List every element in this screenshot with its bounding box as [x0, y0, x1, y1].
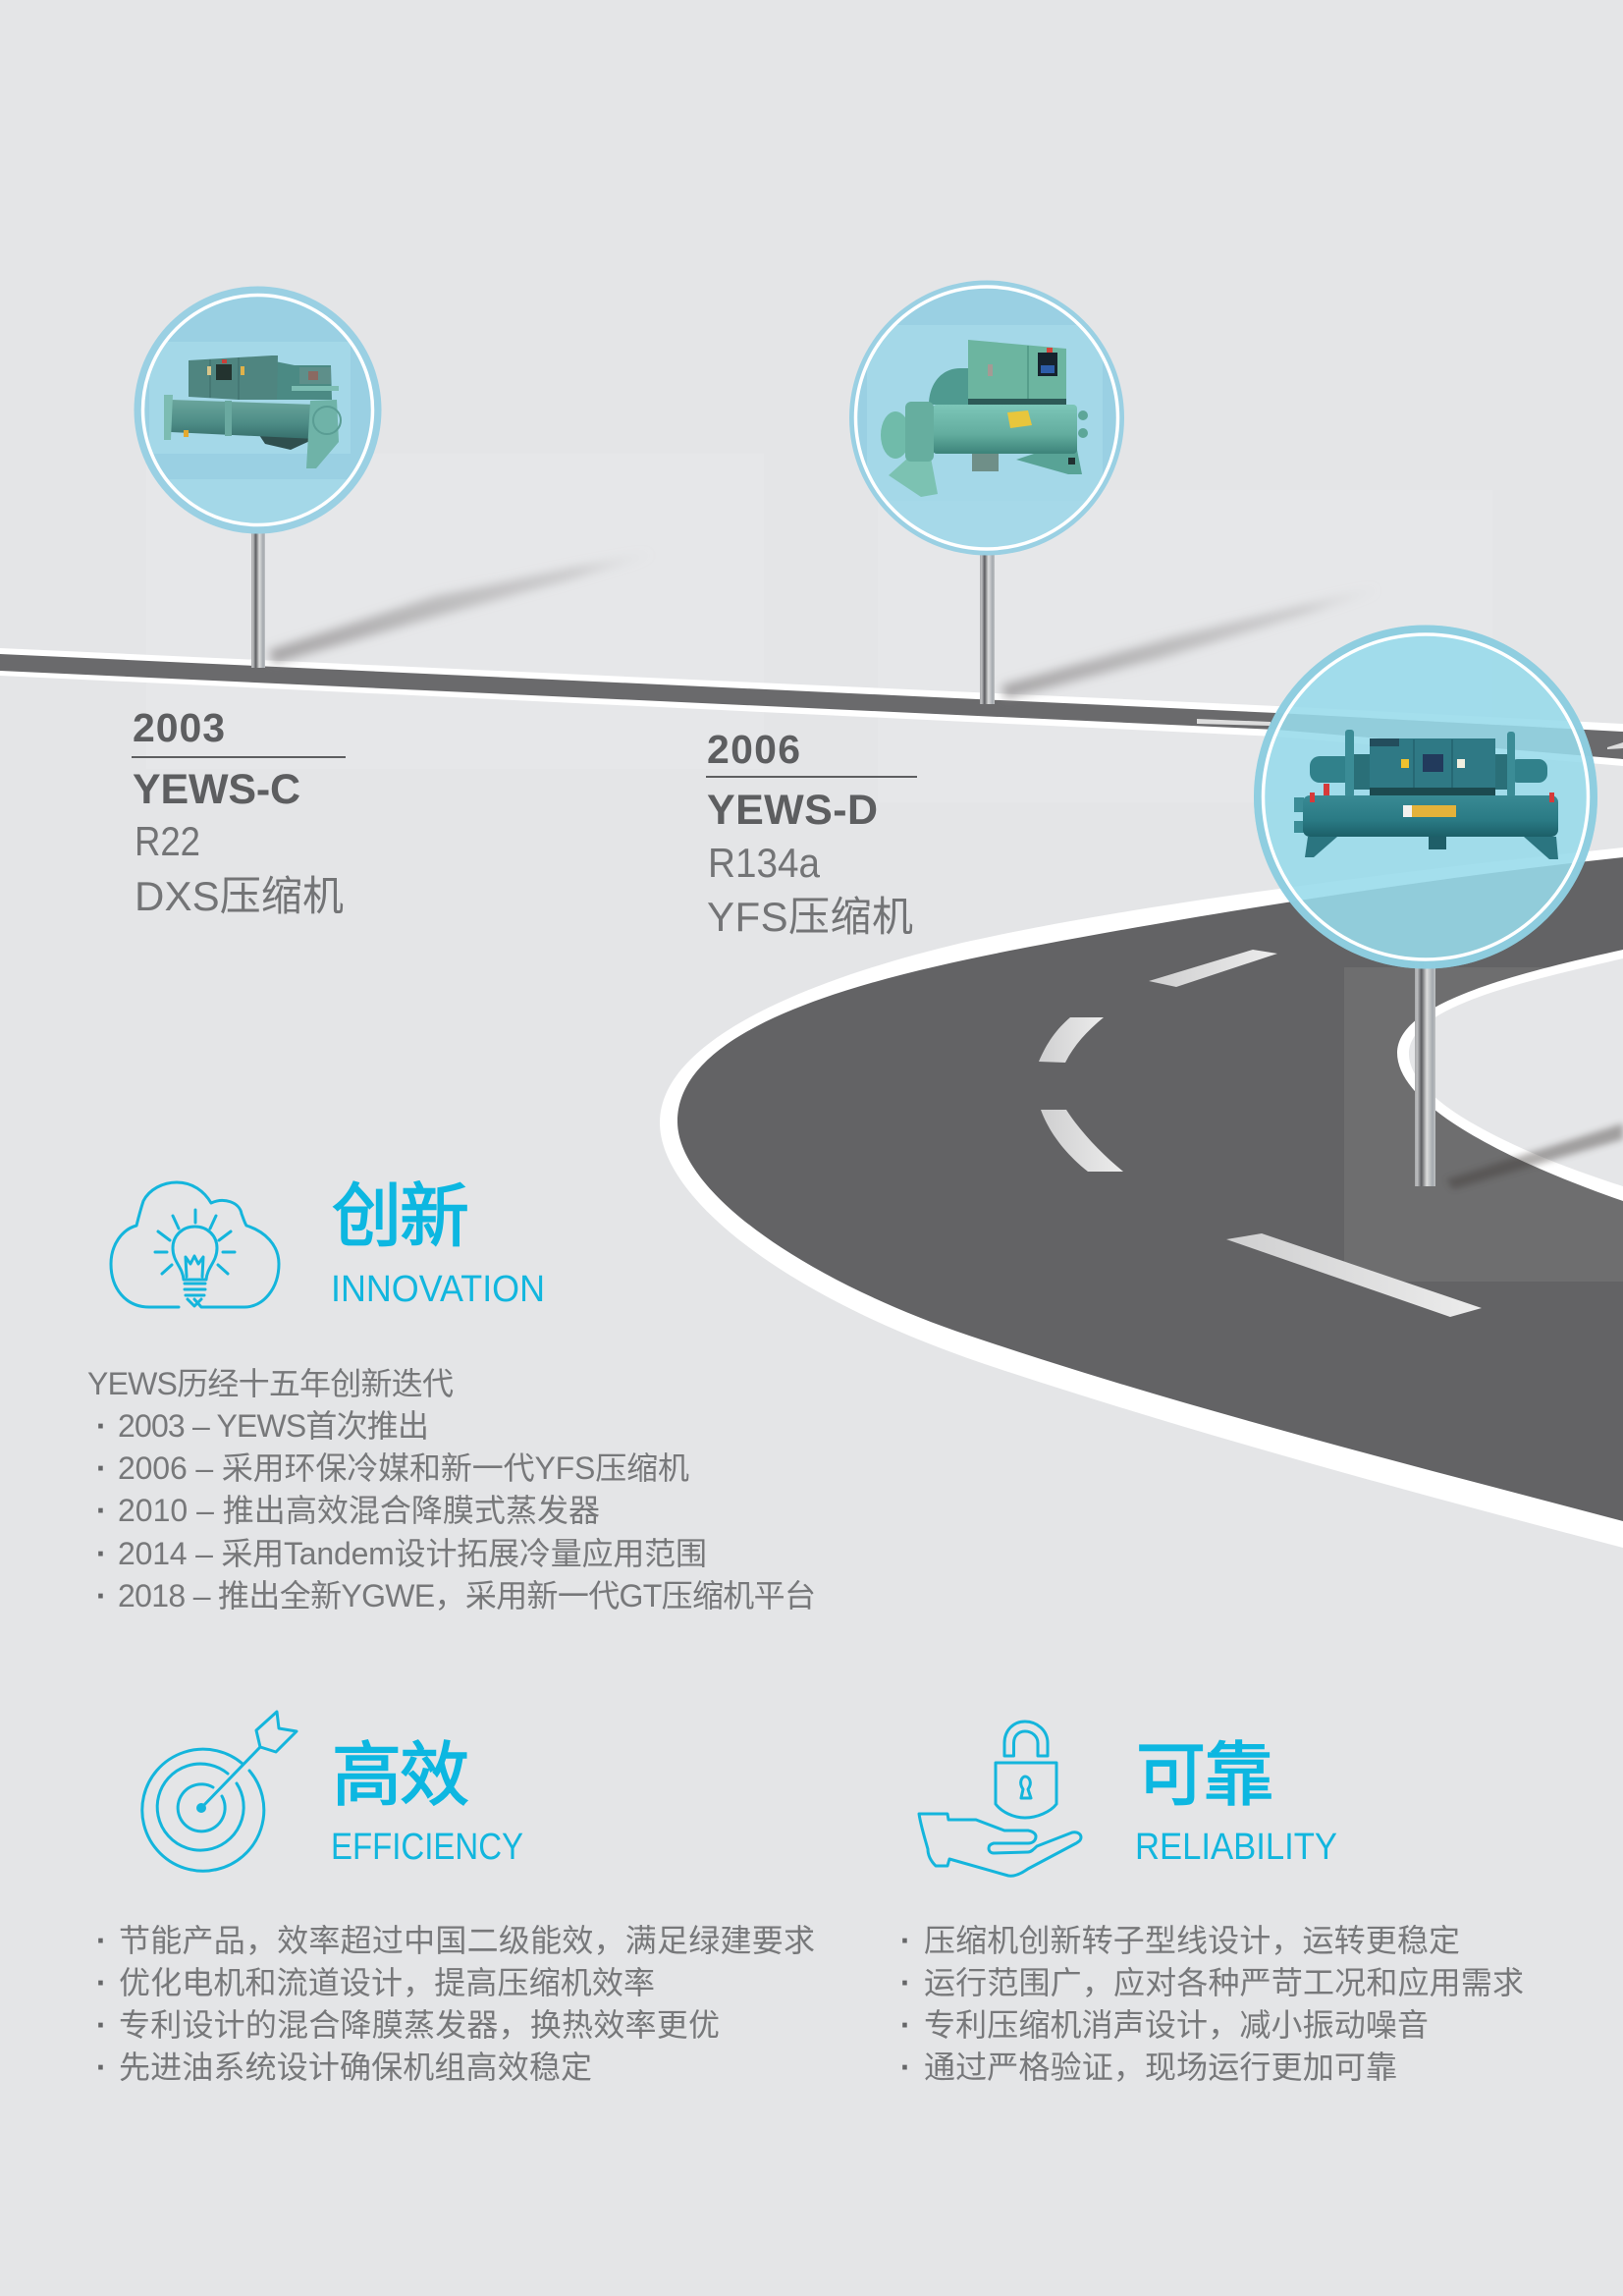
innovation text block: 2018 – 推出全新YGWE，采用新一代GT压缩机平台 [118, 1578, 816, 1613]
icon: target with arrow [142, 1712, 297, 1871]
milestone label: 2003: 2003 [133, 705, 225, 750]
milestone label: 2006: YFS压缩机 [707, 894, 913, 940]
reliability text block: · [900, 2007, 911, 2043]
milestone label: 2003: R22 [135, 818, 200, 864]
heading: 高效: 高效 [332, 1737, 469, 1815]
innovation text block: 2014 – 采用Tandem设计拓展冷量应用范围 [118, 1536, 707, 1571]
heading: 创新: 创新 [332, 1178, 469, 1256]
section: innovation [87, 1178, 816, 1613]
subheading: INNOVATION: INNOVATION [331, 1269, 545, 1310]
icon: lock over hand [919, 1722, 1081, 1876]
section: reliability [900, 1722, 1524, 2085]
icon: chiller unit YGWE [1294, 730, 1558, 859]
innovation text block: · [96, 1493, 107, 1528]
efficiency text block: · [96, 2050, 107, 2085]
pole 2018 [1415, 962, 1435, 1186]
icon: cloud with light bulb [111, 1182, 279, 1307]
reliability text block: 运行范围广，应对各种严苛工况和应用需求 [924, 1965, 1524, 2000]
innovation text block: · [96, 1578, 107, 1613]
efficiency text block: 优化电机和流道设计，提高压缩机效率 [119, 1965, 655, 2000]
efficiency text block [96, 1923, 815, 2085]
icon: chiller unit C [164, 355, 341, 468]
milestone label: 2003 [132, 705, 346, 919]
milestone label: 2006: YEWS-D [707, 787, 878, 834]
innovation text block: · [96, 1450, 107, 1486]
efficiency text block: · [96, 2007, 107, 2043]
reliability text block: 专利压缩机消声设计，减小振动噪音 [924, 2007, 1429, 2043]
sign: YGWE chiller [1254, 625, 1597, 968]
innovation text block: 2010 – 推出高效混合降膜式蒸发器 [118, 1493, 600, 1528]
reliability text block: · [900, 2050, 911, 2085]
icon: chiller unit D [881, 340, 1088, 497]
efficiency text block: 专利设计的混合降膜蒸发器，换热效率更优 [119, 2007, 720, 2043]
reliability text block: · [900, 1923, 911, 1958]
thin road in the distance [0, 648, 1623, 766]
pole 2003 [251, 525, 265, 668]
sign: YEWS-D chiller [849, 281, 1124, 560]
milestone label: 2006 [706, 727, 917, 940]
reliability text block: 通过严格验证，现场运行更加可靠 [924, 2050, 1397, 2085]
reliability text block: · [900, 1965, 911, 2000]
sign: YEWS-C chiller [134, 287, 381, 538]
innovation text block [87, 1366, 816, 1613]
milestone label: 2003: DXS压缩机 [135, 873, 344, 919]
subheading: RELIABILITY: RELIABILITY [1135, 1827, 1337, 1868]
milestone label: 2006: 2006 [707, 727, 800, 772]
innovation text block: 2006 – 采用环保冷媒和新一代YFS压缩机 [118, 1450, 689, 1486]
heading: 可靠: 可靠 [1136, 1737, 1273, 1815]
efficiency text block: · [96, 1965, 107, 2000]
milestone label: 2006: R134a [708, 840, 821, 886]
innovation text block: · [96, 1536, 107, 1571]
subheading: EFFICIENCY: EFFICIENCY [331, 1827, 523, 1868]
innovation text block: 2003 – YEWS首次推出 [118, 1408, 429, 1444]
pole shadows [269, 552, 1623, 1189]
reliability text block [900, 1923, 1524, 2085]
pole 2006 [980, 550, 995, 704]
milestone label: 2003: YEWS-C [133, 766, 300, 813]
efficiency text block: 先进油系统设计确保机组高效稳定 [119, 2050, 592, 2085]
section: efficiency [96, 1712, 815, 2085]
innovation text block: YEWS历经十五年创新迭代 [87, 1366, 454, 1401]
curved road [660, 847, 1623, 1548]
efficiency text block: 节能产品，效率超过中国二级能效，满足绿建要求 [119, 1923, 815, 1958]
reliability text block: 压缩机创新转子型线设计，运转更稳定 [924, 1923, 1460, 1958]
efficiency text block: · [96, 1923, 107, 1958]
innovation text block: · [96, 1408, 107, 1444]
